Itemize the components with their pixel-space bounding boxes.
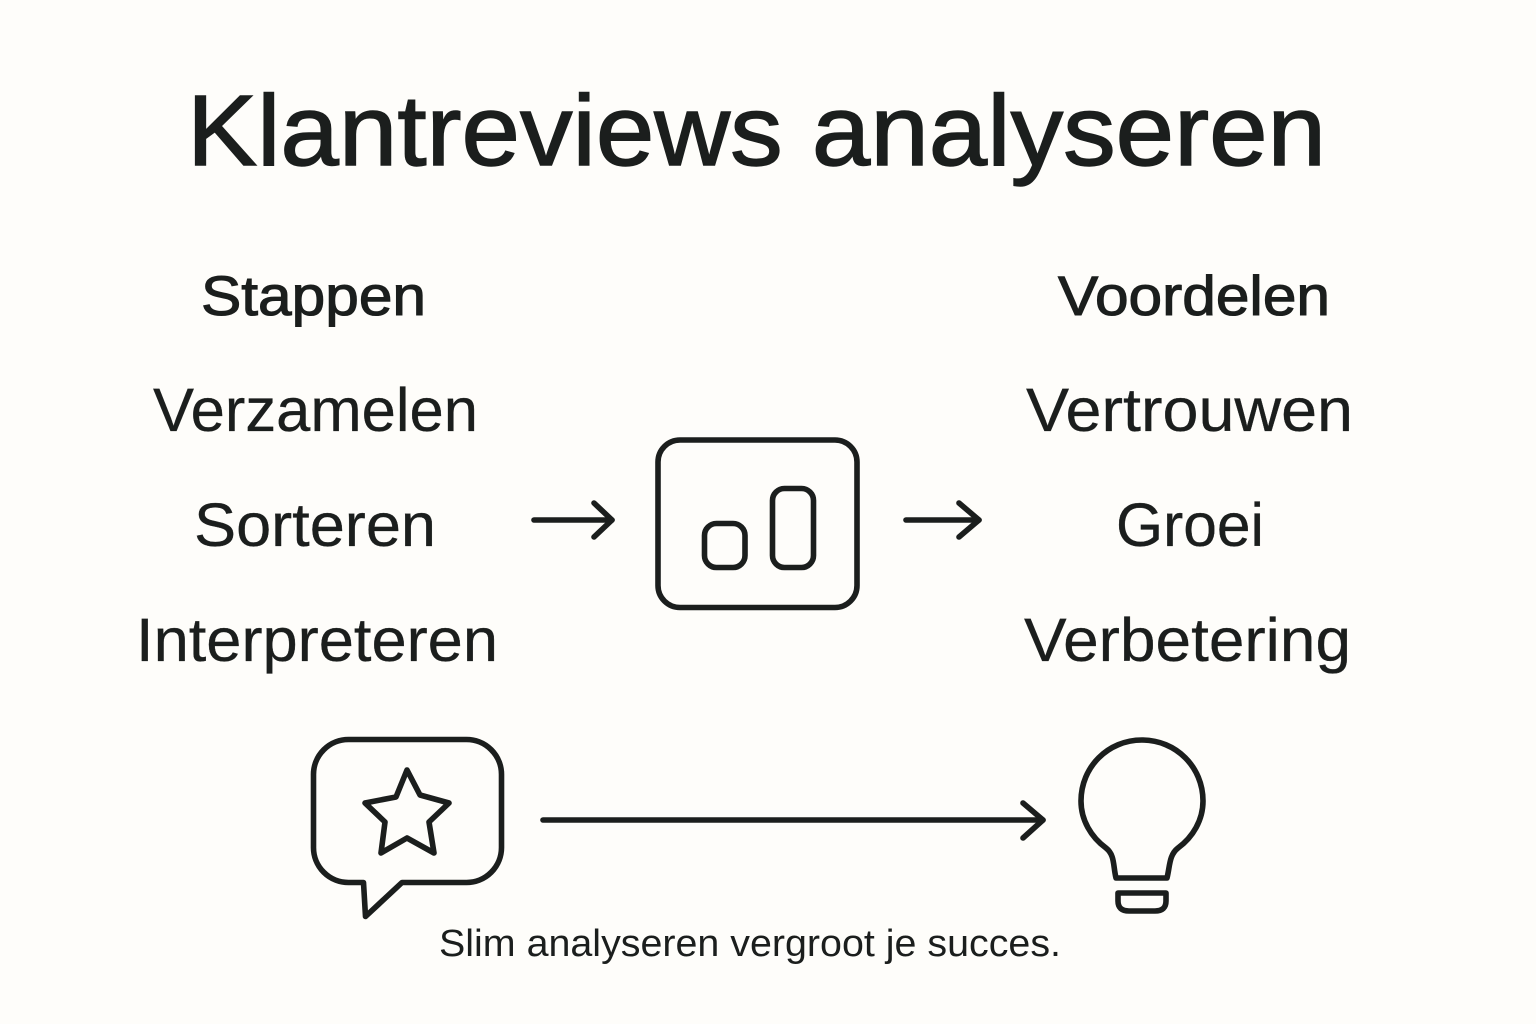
icon: speech bubble with star	[313, 739, 502, 916]
icon: bar chart box	[658, 440, 857, 608]
heading: Stappen: Stappen	[201, 264, 426, 327]
panel: voordelen column	[1024, 264, 1353, 674]
benefit: Verbetering: Verbetering	[1024, 606, 1351, 674]
arrow: stappen to chart	[534, 503, 612, 537]
arrow: chart to voordelen	[906, 503, 979, 537]
step: Verzamelen: Verzamelen	[153, 376, 478, 444]
panel: stappen column	[136, 264, 498, 674]
step: Interpreteren: Interpreteren	[136, 606, 498, 674]
step: Sorteren: Sorteren	[194, 491, 436, 559]
arrow: review to insight	[543, 803, 1043, 838]
icon: light bulb	[1081, 740, 1203, 911]
title: Klantreviews analyseren	[187, 75, 1326, 187]
benefit: Groei: Groei	[1116, 491, 1264, 559]
heading: Voordelen: Voordelen	[1058, 264, 1330, 327]
benefit: Vertrouwen: Vertrouwen	[1026, 376, 1353, 444]
caption: Slim analyseren vergroot je succes.	[439, 923, 1061, 965]
